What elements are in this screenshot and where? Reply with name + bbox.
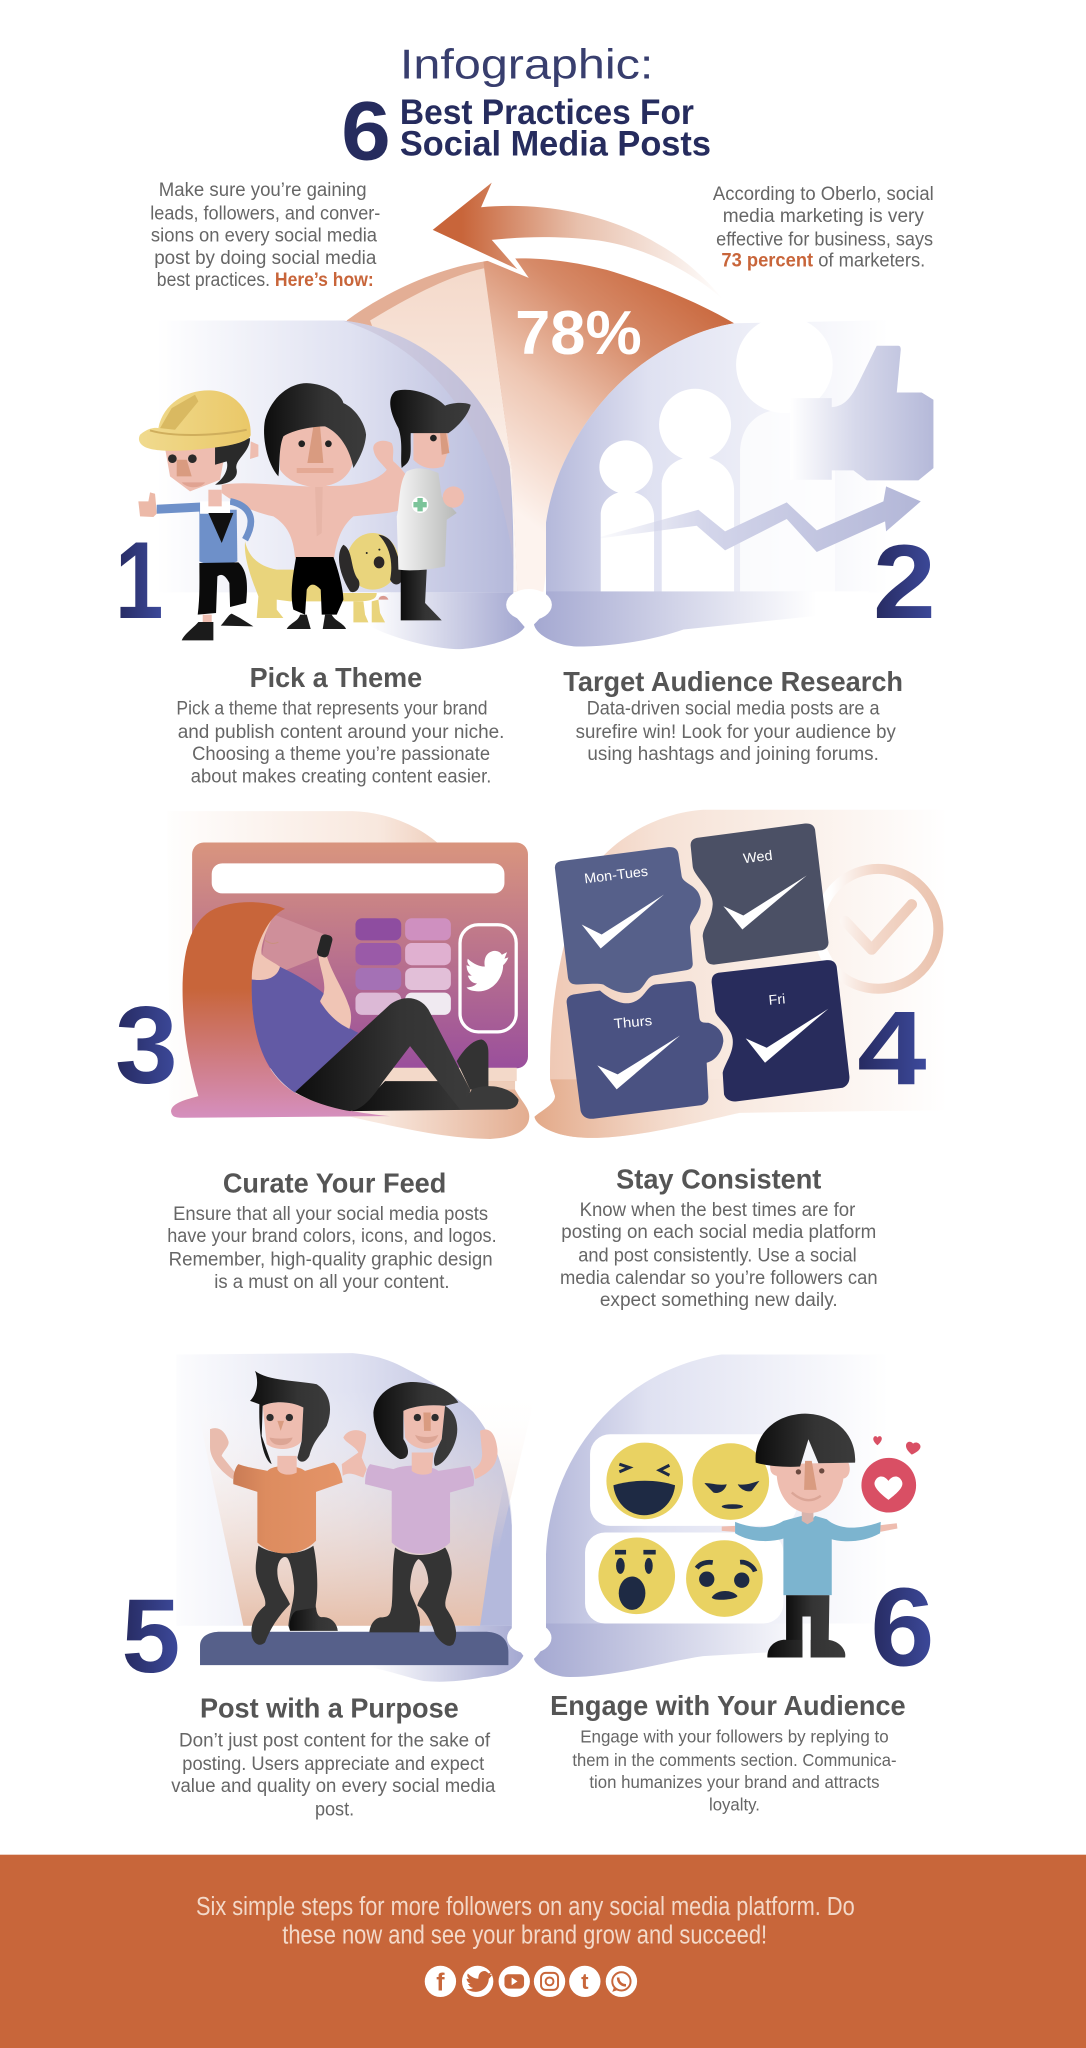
heading: post with a purpose: Post with a Purpose (200, 1693, 459, 1724)
intro text left: best practices. Here’s how: (157, 270, 374, 291)
puzzle tile: wed: Wed (742, 847, 773, 866)
text: target audience research (576, 698, 896, 765)
emoji: wow (598, 1538, 675, 1614)
icon: heart reaction (861, 1436, 921, 1513)
scene (193, 1371, 537, 1665)
text: curate your feed: Remember, high-quality graphic design (169, 1250, 493, 1271)
title: 6 (341, 83, 391, 177)
fan: orange wedge (483, 258, 734, 592)
figure: construction worker (138, 390, 258, 640)
heading: curate your feed: Curate Your Feed (223, 1167, 446, 1198)
text: pick a theme: about makes creating content easier. (191, 766, 491, 787)
tiles and check (555, 823, 938, 1119)
text: post with a purpose: posting. Users appreciate and expect (182, 1754, 485, 1775)
title: Social Media Posts (400, 124, 711, 163)
lower leg (350, 1081, 518, 1111)
title: Best Practices For (400, 93, 694, 132)
icon: middle person (659, 389, 734, 591)
phone (316, 933, 333, 958)
emoji: sad (686, 1540, 763, 1617)
icon: facebook: f (436, 1970, 445, 1997)
card: top emojis (590, 1434, 797, 1526)
icon: facebook (425, 1966, 456, 1997)
connector knob (506, 589, 552, 620)
78 percent fan and arrow (347, 183, 734, 592)
window (192, 842, 528, 1068)
icon: check circle (818, 869, 938, 989)
icon: big person (736, 316, 835, 591)
icon: twitter frame (460, 925, 516, 1032)
hair (171, 902, 390, 1118)
icon: youtube (499, 1966, 530, 1997)
light fan (193, 1389, 537, 1626)
puzzle tile: fri (712, 960, 849, 1101)
intro text left (150, 180, 380, 291)
icon: whatsapp (606, 1966, 637, 1997)
figure: woman on phone (171, 902, 518, 1118)
text: stay consistent: posting on each social media platform (561, 1222, 876, 1243)
fan: light wedge (347, 262, 517, 592)
intro text right: effective for business, says (716, 230, 933, 251)
icon: tumblr: t (581, 1969, 589, 1994)
figure: orange shirt person (210, 1371, 367, 1645)
text: post with a purpose: post. (315, 1800, 354, 1821)
text: curate your feed (167, 1204, 497, 1293)
panel background (546, 1354, 915, 1624)
text: stay consistent: and post consistently. Use a social (578, 1246, 857, 1267)
heading: engage with your audience: Engage with Your Audience (550, 1690, 906, 1721)
text: engage with your audience: Engage with your followers by replying to (580, 1726, 889, 1746)
icon: trend arrow (590, 486, 921, 552)
text: post with a purpose: value and quality on every social media (171, 1776, 496, 1797)
text: target audience research: surefire win! Look for your audience by (576, 722, 896, 743)
text: pick a theme: Pick a theme that represents your brand (176, 698, 487, 719)
number 6: 6 (870, 1564, 934, 1689)
intro text right: 73 percent of marketers. (721, 250, 925, 271)
text: engage with your audience: them in the comments section. Communica- (572, 1750, 897, 1770)
number 5: 5 (122, 1578, 180, 1695)
footer text: Six simple steps for more followers on any social media platform. Do (196, 1893, 855, 1921)
connector knob (507, 1622, 551, 1654)
emoji: angry (692, 1443, 769, 1520)
panel base band (314, 592, 525, 649)
text: engage with your audience: tion humanizes your brand and attracts (589, 1772, 880, 1792)
intro text left: sions on every social media (151, 226, 377, 247)
face (252, 920, 280, 980)
figure: doctor (390, 390, 471, 620)
arrow (433, 183, 723, 300)
panel base band (535, 1079, 740, 1138)
icon: small person (599, 440, 654, 591)
puzzle tile: mon-tues (555, 847, 701, 993)
panel background (176, 1353, 512, 1626)
text: stay consistent: expect something new daily. (600, 1290, 838, 1311)
heading: target audience research: Target Audience Research (563, 666, 903, 697)
text: curate your feed: have your brand colors, icons, and logos. (167, 1226, 497, 1247)
figure: pink shirt person (365, 1382, 497, 1646)
text: pick a theme: Choosing a theme you’re passionate (192, 744, 490, 765)
icon: twitter (462, 1966, 493, 1997)
text: pick a theme (176, 698, 504, 787)
heading: pick a theme: Pick a Theme (250, 662, 422, 693)
panel base band (534, 1624, 869, 1677)
puzzle tile: fri: Fri (768, 990, 786, 1008)
app grid (355, 918, 451, 1015)
text: stay consistent (560, 1200, 878, 1311)
percentage: 78% (515, 299, 642, 368)
arm (318, 956, 351, 1029)
figure: muscle man (222, 383, 415, 629)
intro text right (713, 184, 934, 271)
silhouettes and icons (590, 316, 933, 591)
icon: instagram (534, 1966, 565, 1997)
text: post with a purpose (171, 1730, 496, 1821)
intro text left: leads, followers, and conver- (150, 203, 380, 224)
icon: thumbs up (790, 346, 933, 480)
intro text right: According to Oberlo, social (713, 184, 934, 205)
intro text left: Make sure you’re gaining (159, 180, 367, 201)
panel base tail (353, 1626, 523, 1682)
foot (460, 1086, 518, 1109)
calf (457, 1039, 488, 1089)
emoji: laughing (606, 1443, 683, 1519)
puzzle tile: thurs (567, 981, 723, 1119)
lavender edge strip (480, 1479, 512, 1626)
panel: step 4 (535, 810, 947, 1138)
panel: step 5 (122, 1353, 537, 1695)
puzzle tile: wed (691, 823, 828, 965)
shirt (252, 967, 358, 1093)
text: target audience research: Data-driven social media posts are a (587, 698, 880, 719)
panel background (167, 811, 529, 1139)
intro text left: post by doing social media (154, 248, 377, 269)
number 1: 1 (115, 520, 163, 642)
search bar (212, 863, 504, 893)
title (341, 40, 711, 177)
icon: tumblr (569, 1966, 601, 1997)
number 4: 4 (857, 990, 927, 1107)
number 3: 3 (115, 985, 178, 1107)
panel: step 2 (534, 316, 936, 647)
card: bottom emojis (585, 1533, 783, 1623)
text: target audience research: using hashtags and joining forums. (587, 744, 879, 765)
text: curate your feed: is a must on all your content. (214, 1272, 450, 1293)
puzzle tile: thurs: Thurs (613, 1012, 653, 1031)
platform (200, 1632, 508, 1665)
panel: step 1 (115, 321, 525, 649)
panel background (157, 321, 513, 592)
panel: step 3 (115, 811, 529, 1139)
figures: characters and dog (138, 383, 471, 640)
title: Infographic: (400, 40, 653, 87)
number 2: 2 (873, 524, 936, 641)
strip under window (383, 1068, 517, 1081)
text: stay consistent: Know when the best times are for (580, 1200, 855, 1221)
figure: dog head (339, 533, 403, 600)
text: curate your feed: Ensure that all your social media posts (173, 1204, 488, 1225)
footer band (0, 1855, 1086, 2048)
main leg (295, 998, 470, 1111)
puzzle tile: mon-tues: Mon-Tues (583, 863, 649, 886)
text: post with a purpose: Don’t just post content for the sake of (179, 1730, 491, 1751)
phone cone (262, 913, 325, 971)
panel background (546, 320, 902, 592)
footer text (196, 1893, 855, 1950)
scene (585, 1414, 921, 1657)
panel: step 6 (534, 1354, 934, 1689)
intro text right: media marketing is very (723, 206, 924, 227)
panel background (535, 810, 947, 1138)
footer text: these now and see your brand grow and succeed! (282, 1922, 767, 1950)
text: engage with your audience (572, 1726, 897, 1814)
heading: stay consistent: Stay Consistent (616, 1164, 821, 1195)
text: stay consistent: media calendar so you’re followers can (560, 1268, 878, 1289)
text: pick a theme: and publish content around your niche. (178, 722, 504, 743)
figure: dog body (245, 541, 385, 622)
text: engage with your audience: loyalty. (709, 1794, 760, 1814)
panel base band (534, 591, 869, 647)
figure: man with outstretched arms (722, 1414, 897, 1657)
